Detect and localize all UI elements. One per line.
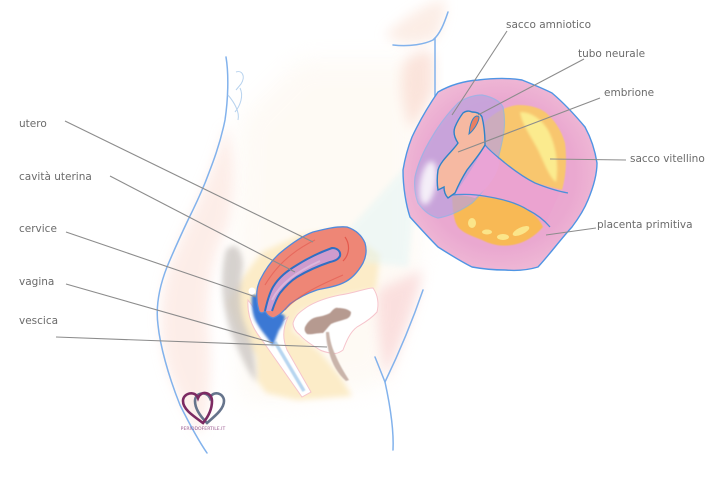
labels left: utero	[19, 118, 47, 130]
labels right	[506, 19, 705, 231]
labels right: sacco vitellino	[630, 153, 705, 165]
labels left: vagina	[19, 276, 54, 288]
skin wash	[235, 60, 420, 400]
labels left	[19, 118, 92, 327]
logo: two hearts	[181, 393, 226, 432]
cavity highlight	[272, 261, 320, 300]
bladder and bowel	[293, 288, 378, 381]
yellow pelvic tissue	[228, 228, 380, 400]
logo: two hearts: PERIODOFERTILE.IT	[181, 426, 226, 432]
uterus	[252, 227, 366, 346]
orange placenta	[452, 196, 543, 246]
front belly pink shading	[161, 125, 233, 435]
outer sphere	[403, 78, 597, 270]
labels left: vescica	[19, 315, 58, 327]
shoulder and back shading	[385, 0, 445, 44]
labels right: embrione	[604, 87, 654, 99]
enlarged embryo sac	[403, 78, 597, 270]
body illustration: pelvic profile	[157, 0, 448, 453]
rectum tail	[326, 332, 349, 381]
neural tube	[469, 116, 479, 134]
labels left: cervice	[19, 223, 57, 235]
labels right: tubo neurale	[578, 48, 645, 60]
signature	[228, 72, 243, 120]
labels right: sacco amniotico	[506, 19, 591, 31]
labels right: placenta primitiva	[597, 219, 693, 231]
bowel	[305, 308, 351, 334]
amnion pink lower inner	[455, 145, 499, 198]
labels left: cavità uterina	[19, 171, 92, 183]
cervix blue	[252, 295, 285, 346]
wall shading	[265, 240, 343, 310]
sac lines	[485, 145, 568, 193]
uterine cavity	[265, 248, 340, 311]
amniotic sac	[415, 95, 504, 218]
cervical white dot	[248, 288, 256, 294]
yellow yolk sac	[485, 105, 566, 190]
embryo	[437, 111, 485, 198]
leader lines	[56, 31, 626, 347]
grey rear tissue	[222, 246, 256, 382]
body outlines	[157, 12, 448, 453]
uterine wall	[257, 227, 366, 318]
rays linking uterus to enlargement	[350, 150, 420, 267]
vagina canal	[248, 300, 311, 397]
pink stalk area	[452, 145, 560, 225]
